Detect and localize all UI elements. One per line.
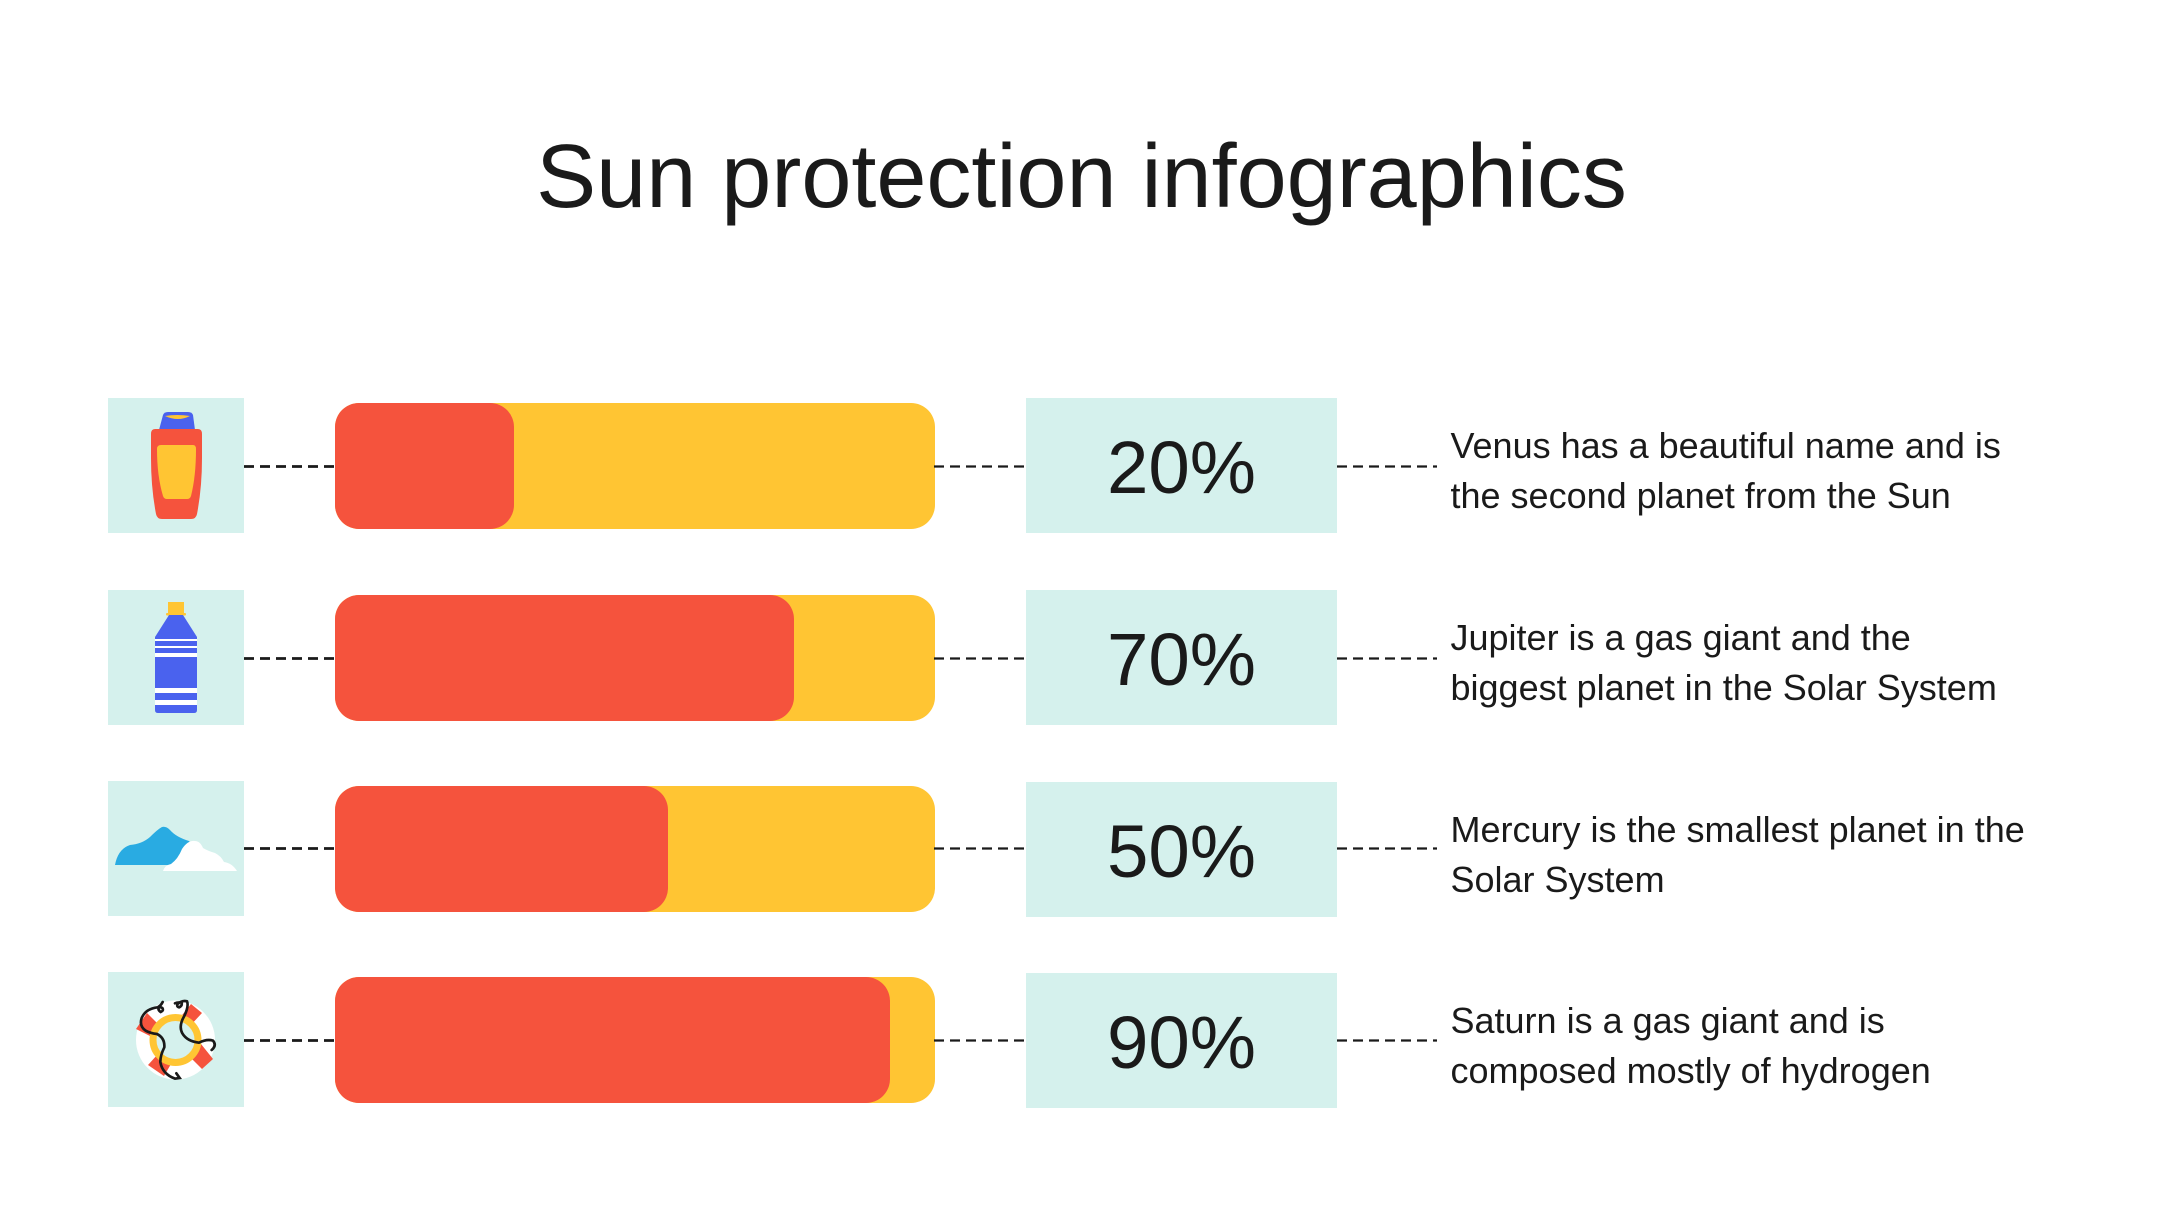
connector xyxy=(934,1039,1024,1042)
description: Jupiter is a gas giant and the xyxy=(1450,617,1911,658)
icon: sunscreen bottle xyxy=(108,398,244,533)
description xyxy=(1450,1000,1931,1091)
progress bar xyxy=(335,977,935,1103)
connector xyxy=(1337,657,1437,660)
connector xyxy=(1337,1039,1437,1042)
description: Mercury is the smallest planet in the xyxy=(1450,808,2025,850)
connector xyxy=(244,847,334,850)
bar fill xyxy=(335,786,668,912)
progress bar xyxy=(335,786,935,912)
description xyxy=(1450,425,2001,516)
progress bar xyxy=(335,595,935,721)
description: Saturn is a gas giant and is xyxy=(1450,1000,1885,1041)
row: 20% xyxy=(108,398,2001,533)
percentage: 90% xyxy=(1107,1001,1256,1084)
row: 70% xyxy=(108,590,1997,725)
percentage xyxy=(1026,398,1337,533)
description: Solar System xyxy=(1450,858,1665,900)
bar fill xyxy=(335,403,514,529)
description: the second planet from the Sun xyxy=(1450,475,1951,516)
percentage xyxy=(1026,590,1337,725)
progress bar xyxy=(335,403,935,529)
description xyxy=(1450,617,1997,708)
connector xyxy=(934,847,1024,850)
percentage: 20% xyxy=(1107,426,1256,509)
bar fill xyxy=(335,977,890,1103)
row: 50% xyxy=(108,781,2025,917)
title: Sun protection infographics xyxy=(536,127,1627,227)
percentage: 70% xyxy=(1107,618,1256,701)
connector xyxy=(244,1039,334,1042)
percentage: 50% xyxy=(1107,810,1256,892)
connector xyxy=(934,465,1024,468)
connector xyxy=(1337,847,1437,850)
percentage xyxy=(1026,973,1337,1108)
description: composed mostly of hydrogen xyxy=(1450,1050,1931,1091)
percentage xyxy=(1026,782,1337,916)
connector xyxy=(934,657,1024,660)
description: biggest planet in the Solar System xyxy=(1450,667,1997,708)
row: 90% xyxy=(108,972,1931,1108)
icon: clouds xyxy=(108,780,244,916)
connector xyxy=(1337,465,1437,468)
icon: water bottle xyxy=(108,590,244,725)
icon: life ring xyxy=(108,972,244,1107)
connector xyxy=(244,465,334,468)
bar fill xyxy=(335,595,794,721)
description xyxy=(1450,808,2025,900)
description: Venus has a beautiful name and is xyxy=(1450,425,2001,466)
connector xyxy=(244,657,334,660)
